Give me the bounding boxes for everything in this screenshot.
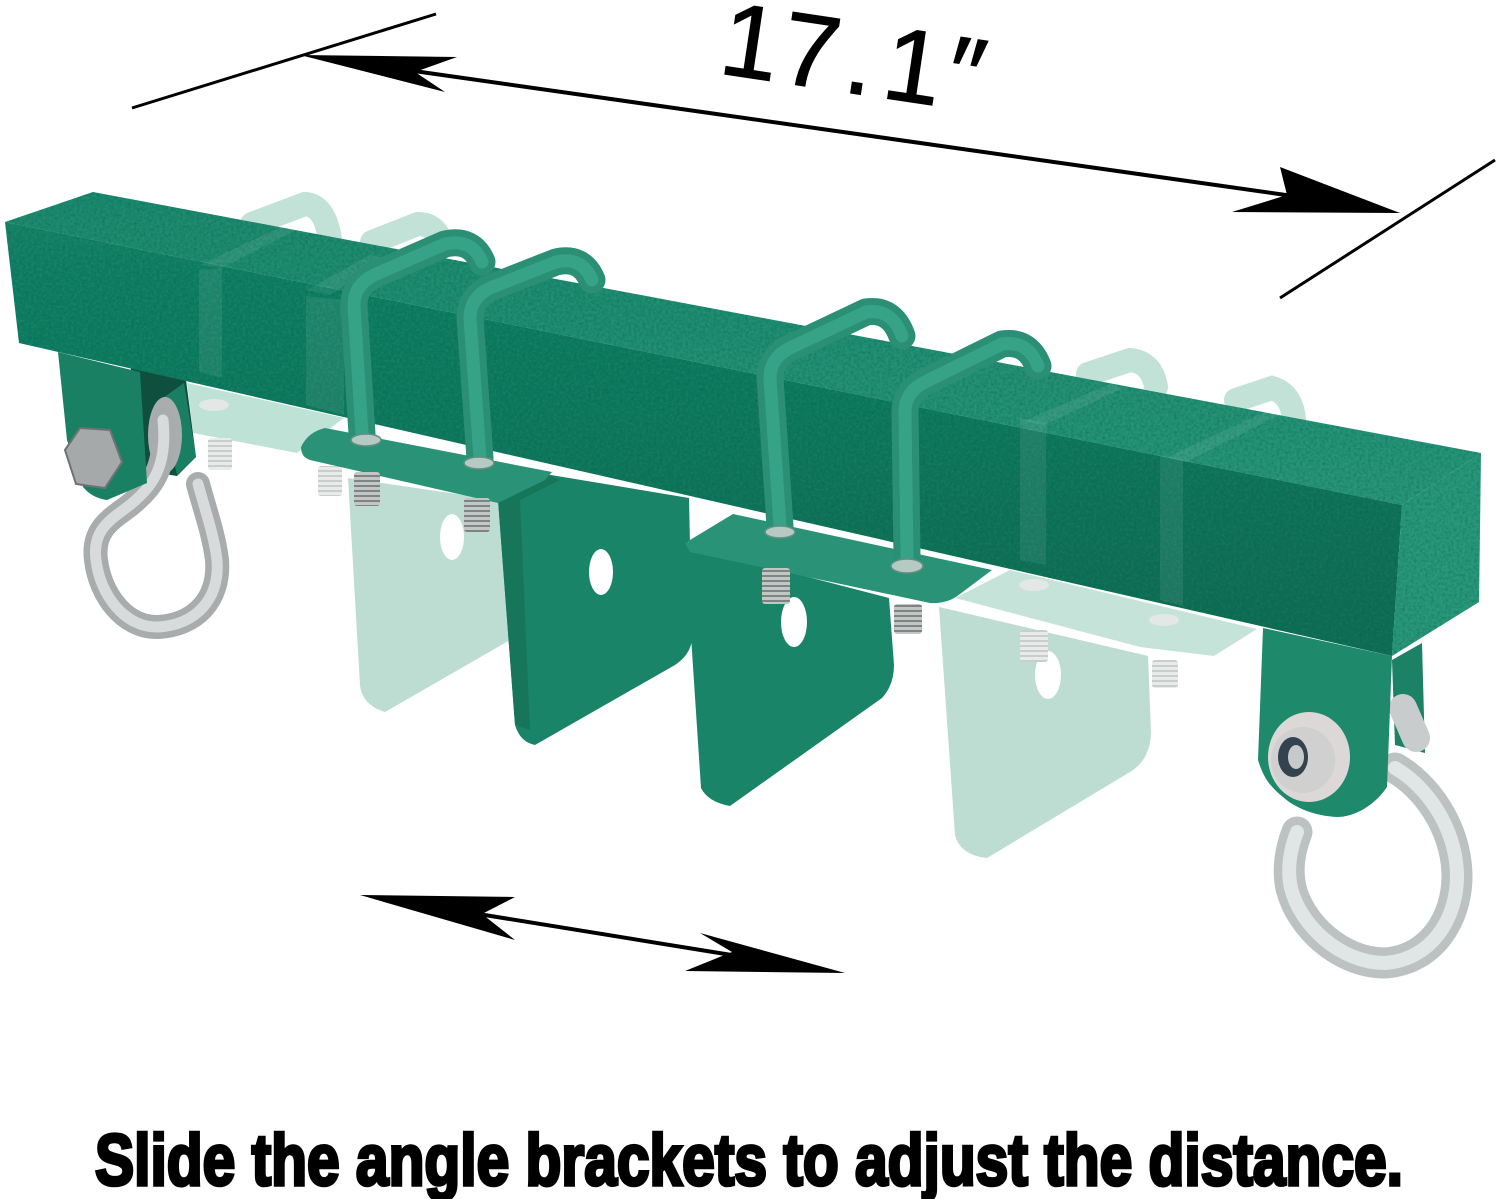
main dimension: double-headed arrow: [300, 55, 1400, 213]
right hook: [1289, 708, 1457, 963]
U-bolt nuts on top of the flanges: [351, 434, 923, 573]
bracket A: solid left angle bracket: [498, 474, 692, 745]
left hook: [95, 420, 217, 627]
ghost bracket straps across the tube: [199, 225, 1280, 606]
right clevis front plate with lock nut: [1258, 628, 1392, 817]
right clevis back plate: [1392, 643, 1425, 753]
bracket B top flange: [685, 514, 992, 603]
tube end face: [1392, 453, 1481, 656]
bracket A top flange: [301, 428, 552, 503]
square steel tube: [5, 192, 1481, 656]
tube top face: [5, 192, 1481, 505]
ghost position: left bracket and its bolts: [187, 383, 510, 712]
left clevis back plate and hook eye: [130, 360, 196, 476]
adjustment range: double-headed arrow: [360, 895, 845, 973]
ghost U-bolts behind the bar: [252, 204, 1294, 420]
tube front face: [5, 222, 1402, 656]
ghost position: right bracket and its bolts: [939, 570, 1257, 858]
left clevis front plate with hex bolt: [58, 352, 147, 500]
main dimension: extension line right: [1280, 160, 1495, 298]
bracket B: solid right angle bracket: [685, 514, 992, 806]
threaded bolt ends under the flanges: [354, 472, 922, 634]
U-bolts: [354, 243, 1038, 558]
main dimension: extension line left: [132, 14, 436, 108]
